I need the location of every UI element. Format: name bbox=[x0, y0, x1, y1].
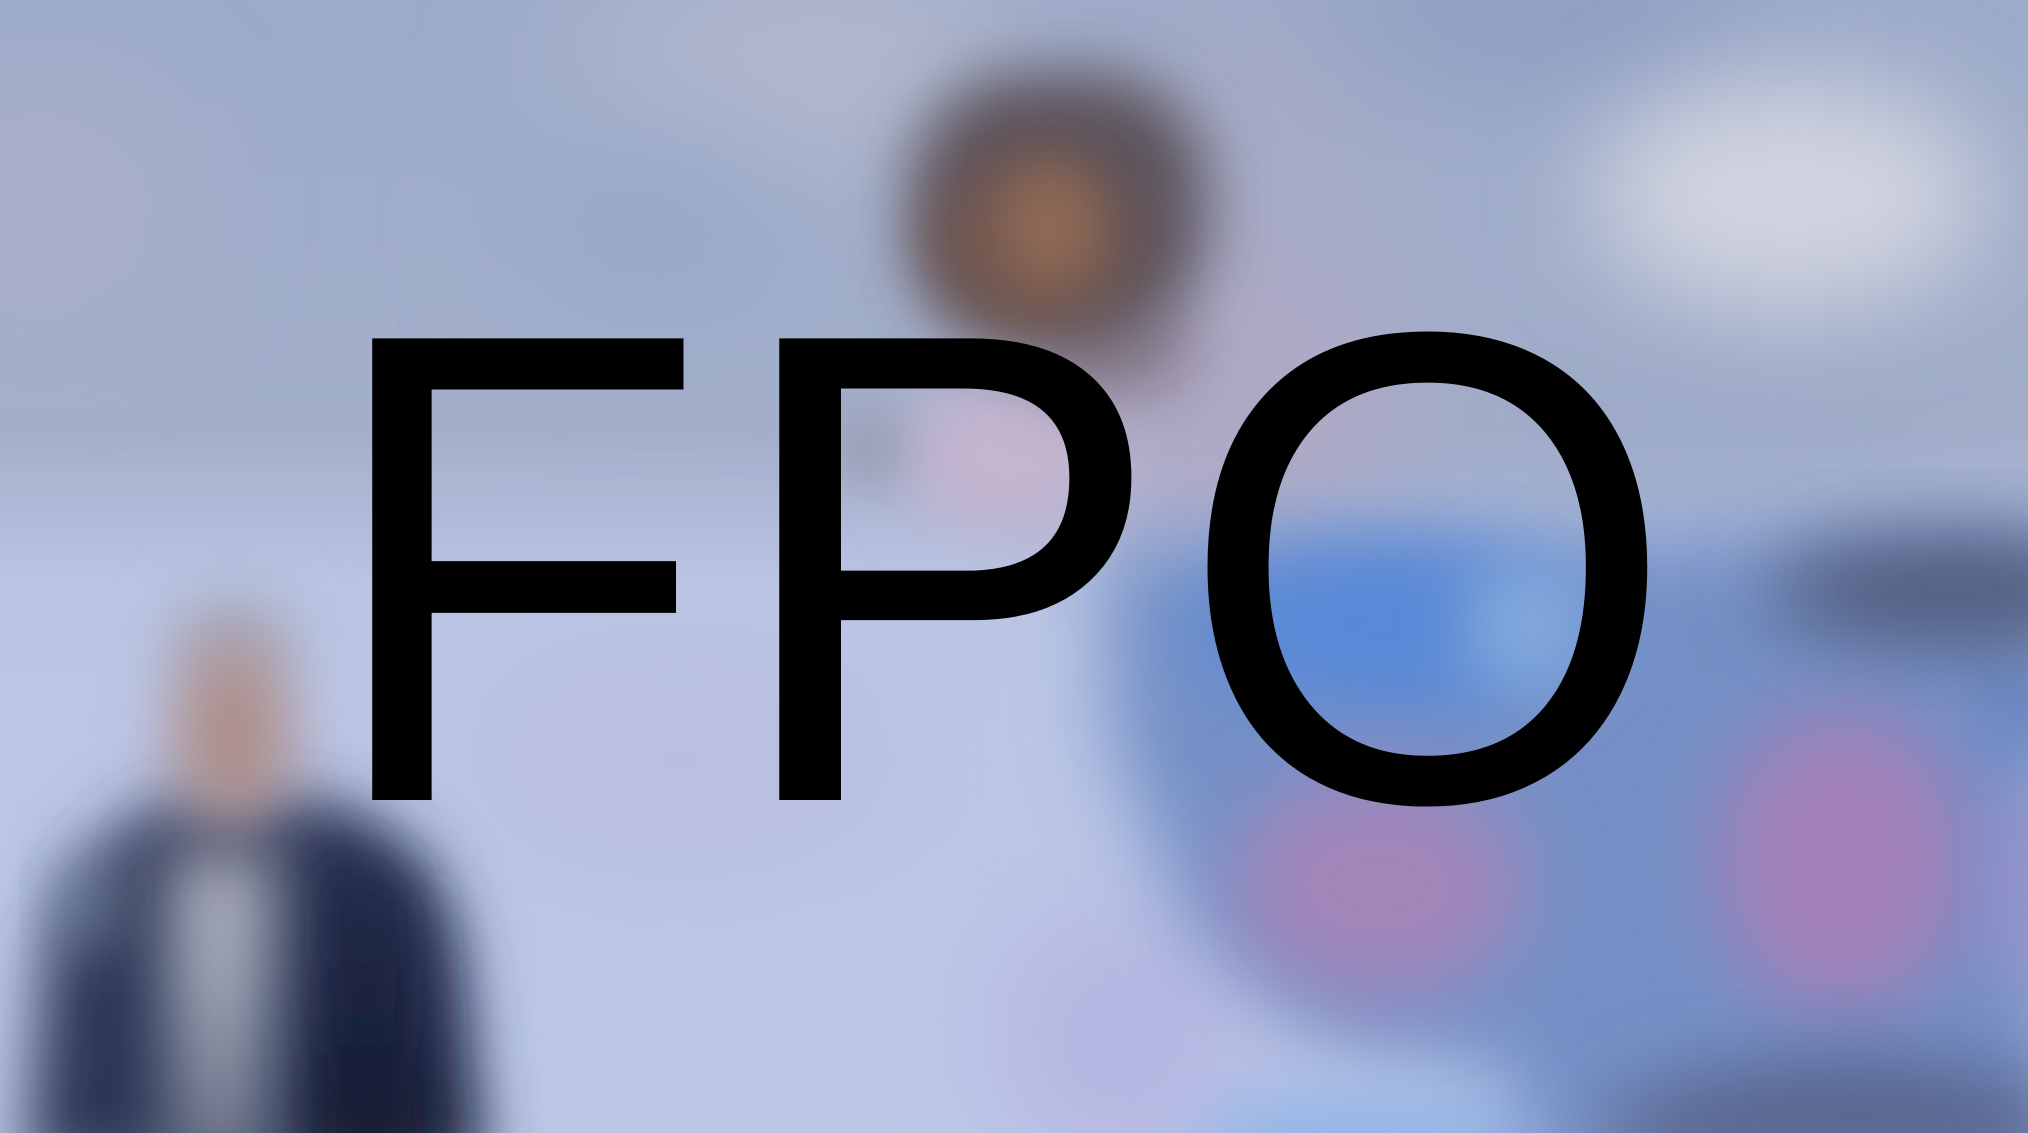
dark bottom-right corner bbox=[1570, 1058, 2028, 1133]
FPO placeholder heading: F bbox=[320, 194, 709, 943]
FPO placeholder heading: O bbox=[1177, 194, 1678, 943]
blue and pink shapes bbox=[1105, 530, 2028, 1133]
FPO placeholder heading: P bbox=[725, 194, 1167, 943]
foreground man bbox=[25, 598, 485, 1133]
dark right band bbox=[1765, 535, 2028, 645]
centre person bbox=[835, 72, 1207, 535]
right-side white shape bbox=[1595, 80, 1985, 310]
